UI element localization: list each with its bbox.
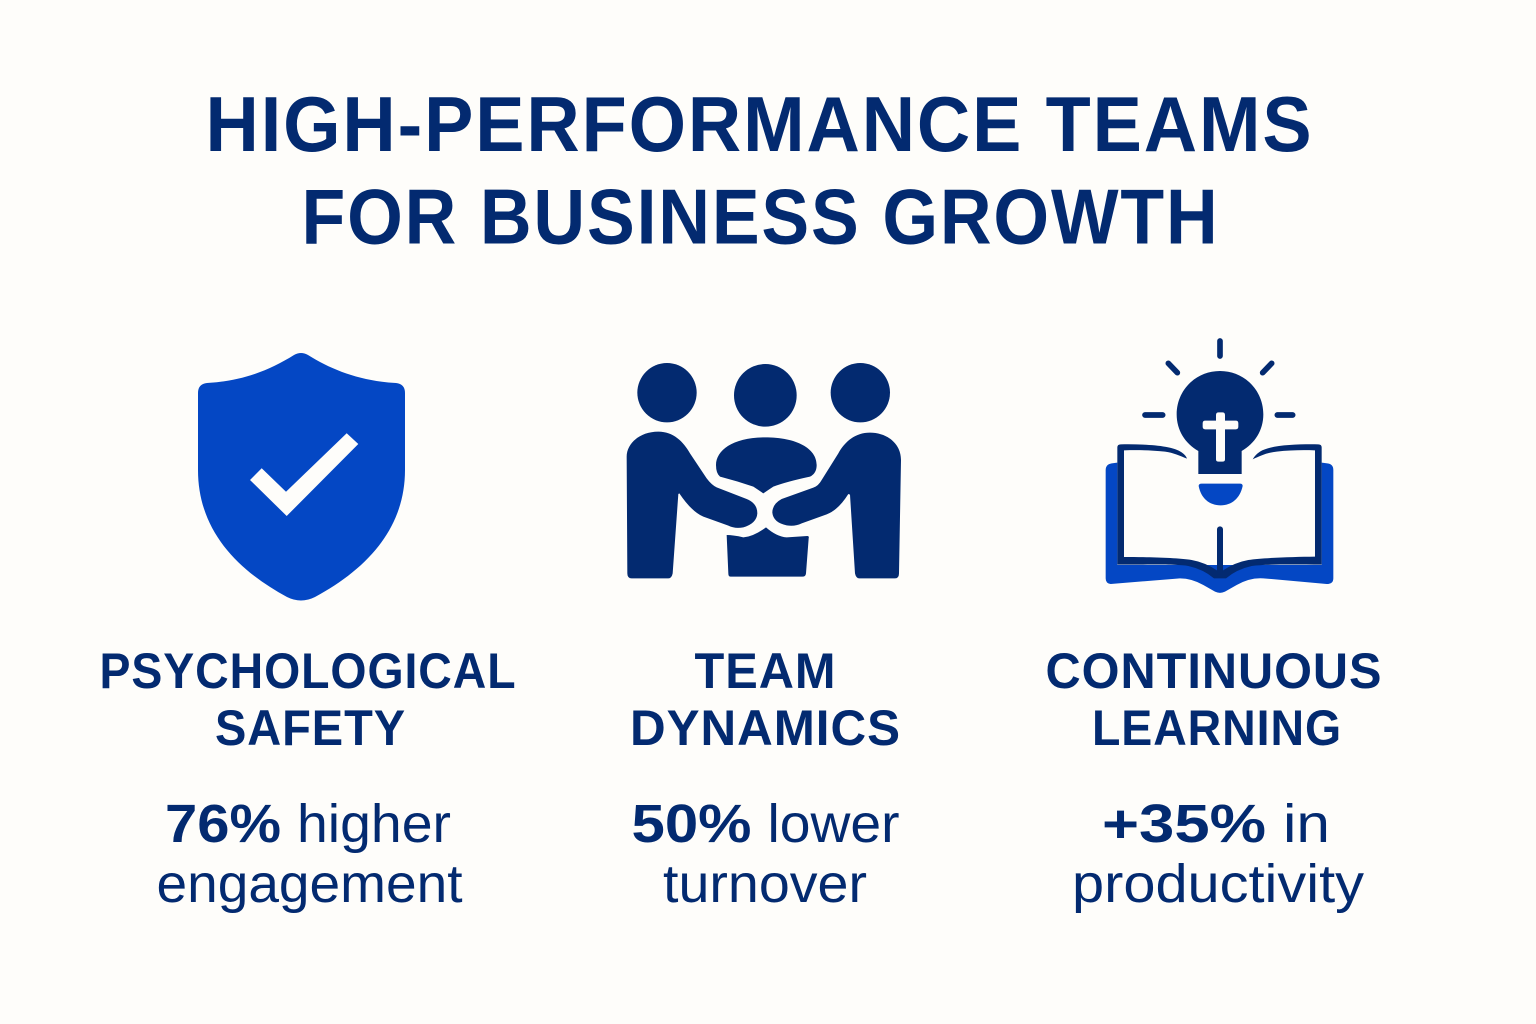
stat: 76% higher engagement bbox=[156, 794, 462, 914]
heading: team dynamics bbox=[630, 643, 901, 756]
stat: 76% higher engagement: 76% bbox=[165, 794, 281, 854]
stat: 50% lower turnover: lower bbox=[768, 794, 900, 854]
heading: psychological safety: SAFETY bbox=[215, 700, 406, 756]
panel: psychological safety bbox=[100, 353, 516, 914]
stat: +35% in productivity: productivity bbox=[1072, 854, 1364, 914]
heading: continuous learning: CONTINUOUS bbox=[1046, 643, 1382, 699]
icon: shield with check mark bbox=[198, 353, 405, 600]
heading: team dynamics: DYNAMICS bbox=[630, 700, 901, 756]
stat: 76% higher engagement: higher bbox=[297, 794, 451, 854]
stat: +35% in productivity: in bbox=[1283, 794, 1330, 854]
stat: 50% lower turnover bbox=[632, 794, 900, 914]
panel: team dynamics bbox=[627, 363, 901, 914]
heading: continuous learning: LEARNING bbox=[1092, 700, 1342, 756]
stat: +35% in productivity bbox=[1072, 794, 1364, 914]
heading: psychological safety: PSYCHOLOGICAL bbox=[100, 643, 516, 699]
heading: psychological safety bbox=[100, 643, 516, 756]
icon: team of three people joining hands bbox=[627, 363, 901, 578]
heading: continuous learning bbox=[1046, 643, 1382, 756]
icon: light bulb over open book bbox=[1106, 341, 1333, 593]
stat: 50% lower turnover: 50% bbox=[632, 794, 752, 854]
title: FOR BUSINESS GROWTH bbox=[302, 172, 1220, 260]
stat: +35% in productivity: +35% bbox=[1102, 794, 1266, 854]
heading: team dynamics: TEAM bbox=[694, 643, 836, 699]
stat: 76% higher engagement: engagement bbox=[156, 854, 462, 914]
title: HIGH-PERFORMANCE TEAMS bbox=[206, 80, 1314, 168]
panel: continuous learning bbox=[1046, 341, 1382, 914]
stat: 50% lower turnover: turnover bbox=[663, 854, 867, 914]
title bbox=[206, 80, 1314, 260]
